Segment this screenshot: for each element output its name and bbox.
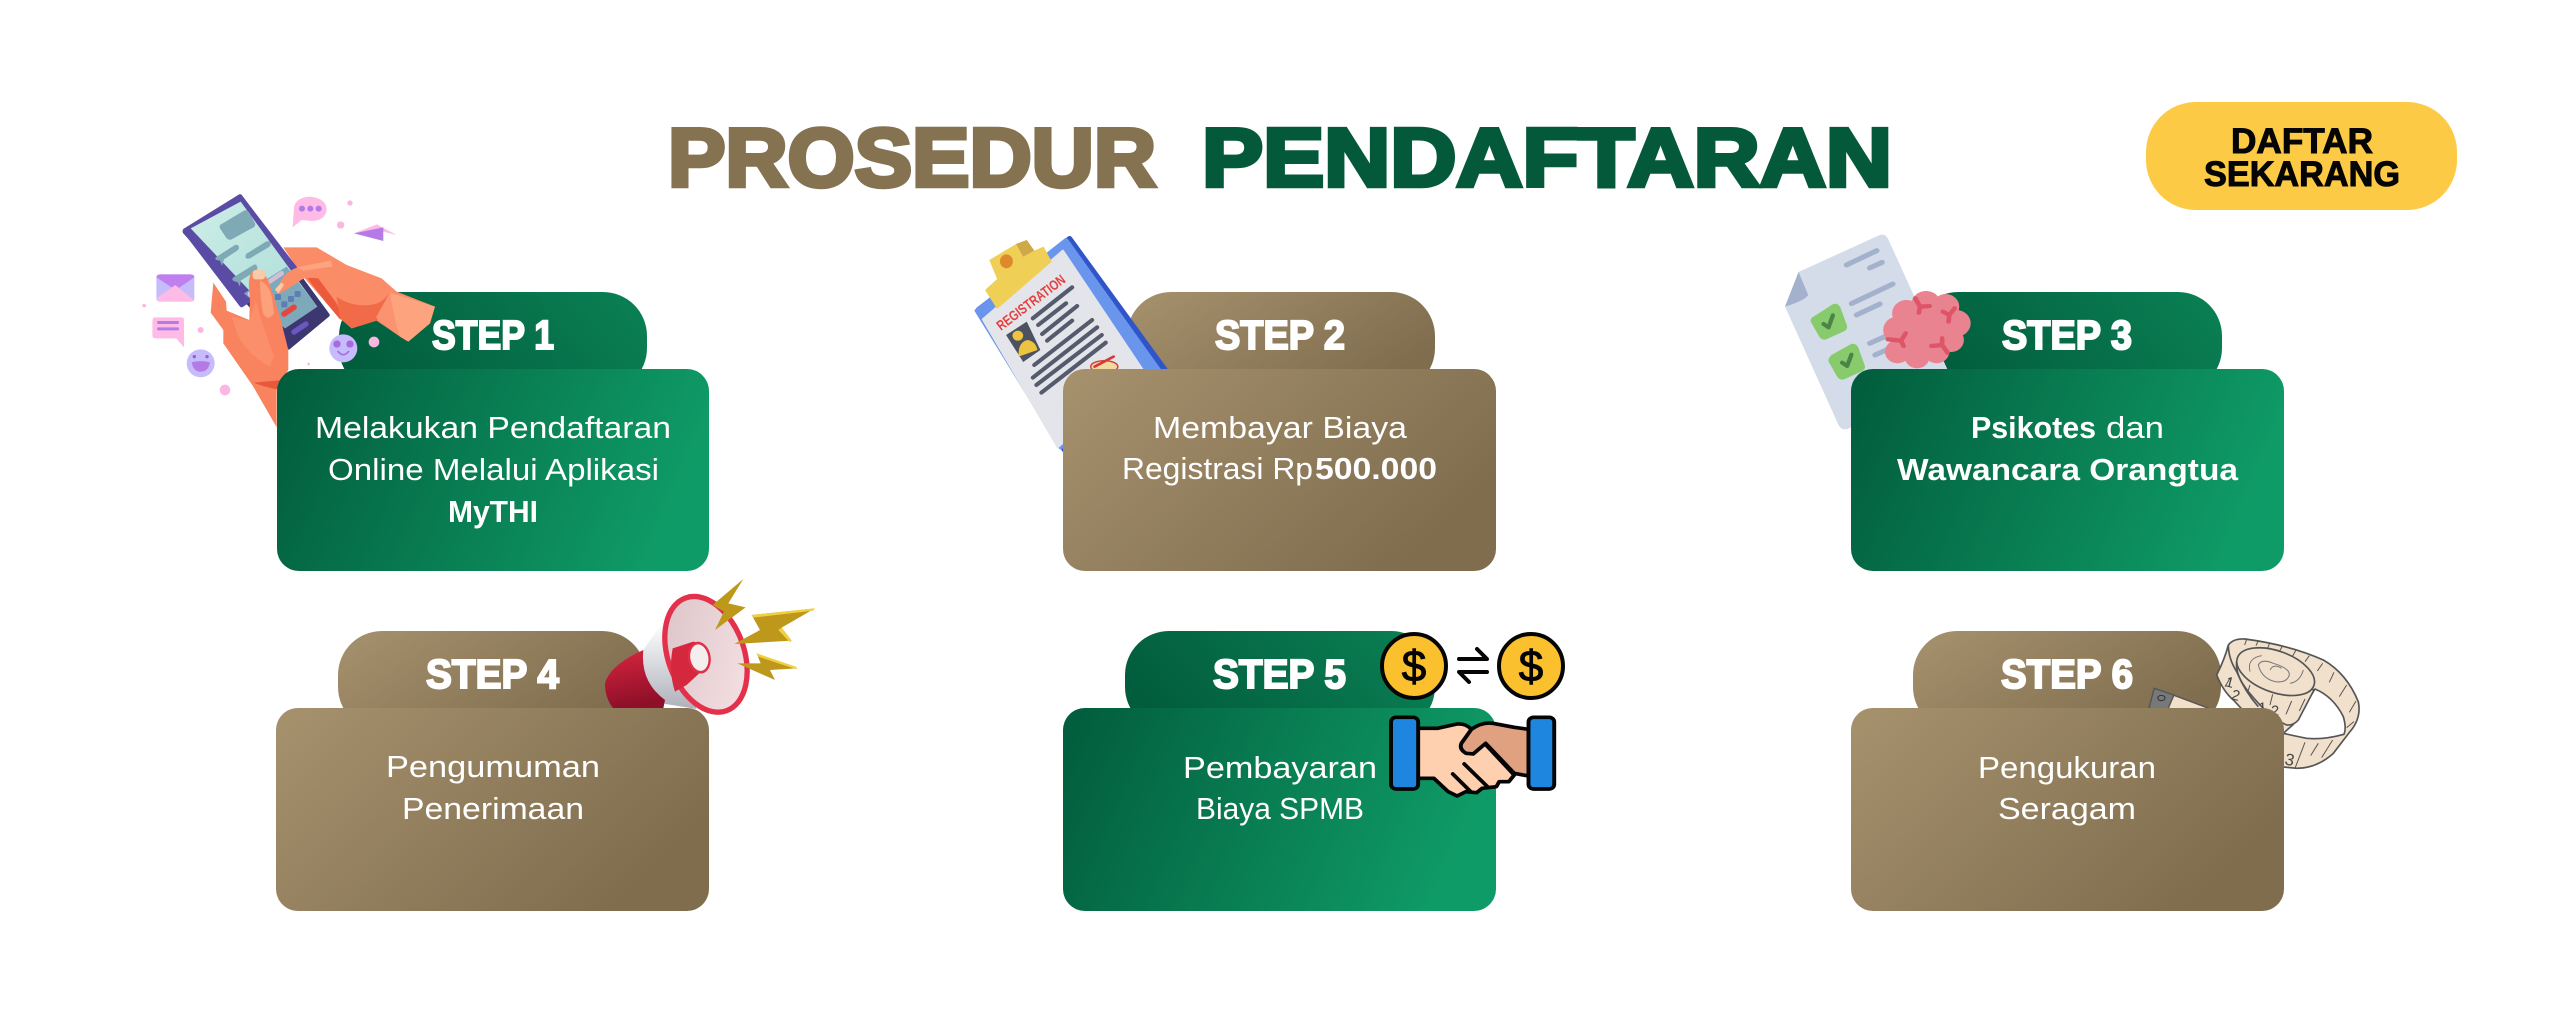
step 4 description: Pengumuman [386,749,600,784]
step 1 description: Melakukan Pendaftaran [315,410,671,445]
icon: coin left [1382,634,1446,698]
icon: coins and handshake [1382,634,1563,796]
step 5 description [1183,750,1377,826]
step 3 description: dan [2106,410,2164,445]
step 1 description [315,410,671,529]
icon: hands holding phone [142,197,435,427]
step 6 label: STEP 6 [2001,651,2133,697]
step 1 label: STEP 1 [432,312,554,358]
panel: step 5 [1063,631,1563,911]
icon: coin right [1499,634,1563,698]
icon: measuring tape [2149,638,2359,770]
step 3 card [1851,369,2284,571]
step 5 description: Pembayaran [1183,750,1377,785]
icon: coin right: $ [1519,642,1543,691]
panel: step 1 [142,197,709,571]
step 5 tab [1125,631,1435,731]
step 6 card [1851,708,2284,911]
phone [185,197,327,347]
button: daftar sekarang [2146,102,2457,210]
step 2 description [1122,410,1437,486]
step 1 description: MyTHI [448,494,538,529]
title word: PROSEDUR: PROSEDUR [668,111,1156,204]
icon: measuring tape: 1 [2258,700,2266,716]
step 3 description: Psikotes [1971,410,2096,445]
button: daftar sekarang: DAFTAR [2231,122,2373,161]
icon: megaphone [605,579,815,724]
icon: checklist paper and brain [1785,235,1971,429]
step 2 label: STEP 2 [1215,312,1345,358]
step 2 description: Membayar Biaya [1153,410,1408,445]
right hand back [283,247,435,342]
step 3 description [1897,410,2239,487]
step 1 description: Online Melalui Aplikasi [328,452,659,487]
index finger [275,261,338,294]
icon: measuring tape: 2 [2230,687,2242,705]
step 1 card [277,369,709,571]
step 3 tab [1914,292,2222,392]
button: daftar sekarang: SEKARANG [2204,155,2400,194]
panel: step 2 [977,238,1496,571]
icon: registration clipboard [977,238,1168,450]
title [668,111,1892,204]
left hand [211,271,288,427]
panel: step 4 [276,579,815,911]
step 4 description: Penerimaan [402,791,584,826]
step 5 description: Biaya SPMB [1196,791,1364,826]
step 6 description: Pengukuran [1978,750,2156,785]
step 6 description: Seragam [1998,791,2136,826]
icon: measuring tape: 3 [2283,750,2296,770]
step 2 tab [1127,292,1435,392]
step 4 tab [338,631,646,731]
step 3 description: Wawancara Orangtua [1897,452,2239,487]
step 2 card [1063,369,1496,571]
icon: registration clipboard: REGISTRATION [993,271,1068,333]
title word: PENDAFTARAN: PENDAFTARAN [1202,111,1892,204]
step 4 card [276,708,709,911]
icon: exchange arrows [1459,649,1487,682]
step 3 label: STEP 3 [2002,312,2132,358]
step 4 label: STEP 4 [426,651,559,697]
step 6 description [1978,750,2156,826]
icon: measuring tape: 2 [2271,704,2279,720]
step 5 label: STEP 5 [1213,651,1346,697]
step 2 description: Registrasi Rp [1122,451,1313,486]
step 2 description: 500.000 [1315,451,1437,486]
step 4 description [386,749,600,826]
panel: step 6 [1851,631,2359,911]
step 5 card [1063,708,1496,911]
icon: coin left: $ [1402,642,1426,691]
panel: step 3 [1785,235,2284,571]
step 6 tab [1913,631,2221,731]
icon: measuring tape: 1 [2224,674,2236,692]
step 1 tab [339,292,647,392]
icon: handshake [1391,717,1554,796]
